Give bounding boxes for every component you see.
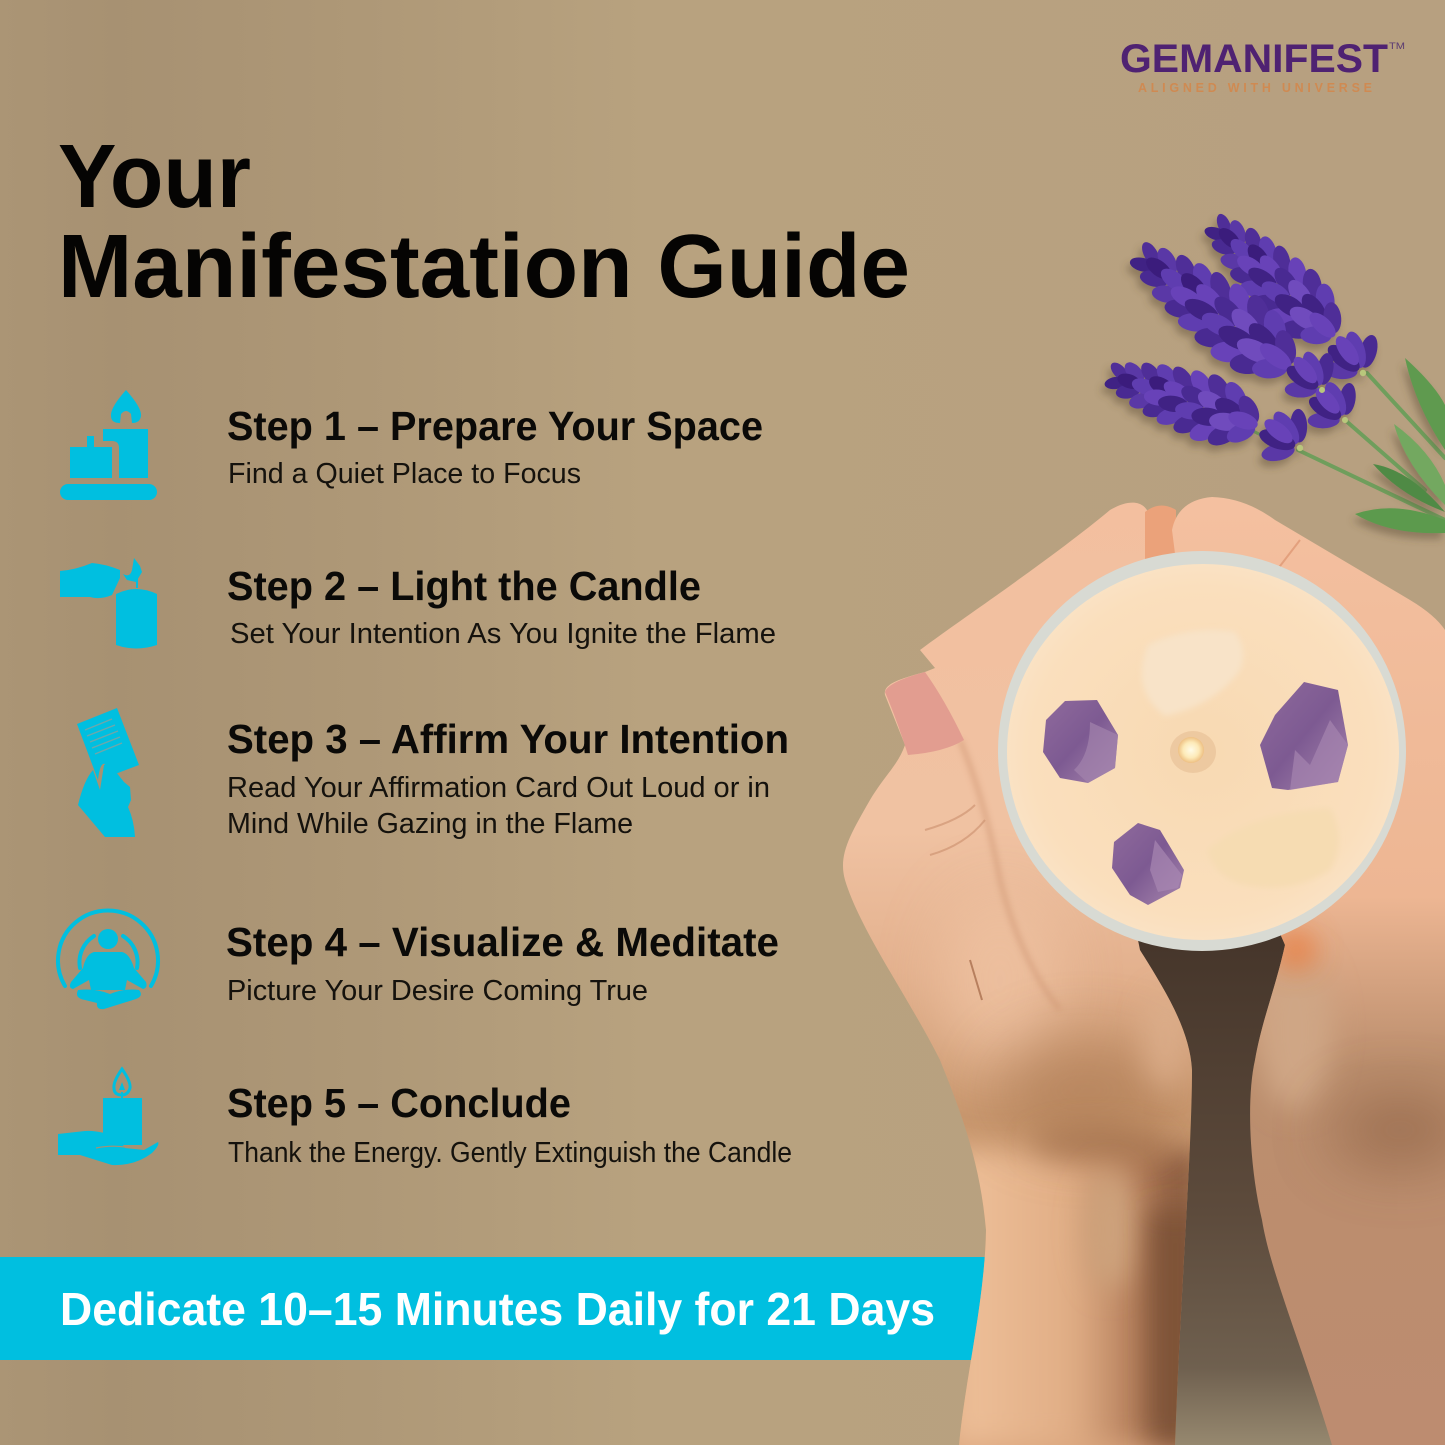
right hand [1145, 490, 1445, 1445]
clear crystal bottom [1207, 808, 1339, 888]
banner text: Dedicate 10–15 Minutes Daily for 21 Days [60, 1283, 935, 1335]
step 5 heading: Step 5 – Conclude [227, 1080, 571, 1126]
title: Manifestation Guide [58, 217, 910, 317]
stems [1255, 338, 1445, 520]
trademark: TM [1389, 41, 1405, 51]
title [58, 127, 910, 317]
step 4 text: Picture Your Desire Coming True [227, 975, 648, 1007]
step 5 [58, 1069, 792, 1169]
candle wax [1007, 564, 1399, 940]
clear crystal top [1142, 630, 1243, 716]
step 4 [58, 910, 779, 1009]
candle [998, 551, 1406, 951]
step 5 text: Thank the Energy. Gently Extinguish the Candle [228, 1137, 792, 1169]
step 3 text [227, 772, 770, 840]
left hand shape [830, 490, 1200, 1445]
icon: candles on tray [60, 390, 157, 500]
right hand shape [1160, 490, 1445, 1445]
left hand [830, 490, 1200, 1445]
logo tagline: ALIGNED WITH UNIVERSE [1138, 81, 1372, 95]
step 1 heading: Step 1 – Prepare Your Space [227, 403, 763, 449]
logo wordmark: GEMANIFEST [1120, 37, 1388, 81]
step 3 [77, 708, 789, 840]
logo [1120, 37, 1405, 95]
amethyst bottom [1112, 823, 1184, 905]
candle glass rim [998, 551, 1406, 951]
middle finger [1145, 505, 1176, 590]
step 4 heading: Step 4 – Visualize & Meditate [226, 919, 779, 965]
title: Your [58, 127, 251, 227]
thumb nail [885, 672, 964, 755]
banner [0, 1257, 990, 1360]
lavender sprigs [1093, 191, 1445, 533]
step 3 heading: Step 3 – Affirm Your Intention [227, 716, 789, 762]
step 1 [60, 390, 763, 500]
step 1 text: Find a Quiet Place to Focus [228, 458, 581, 490]
amethyst right [1260, 682, 1348, 790]
banner bar [0, 1257, 990, 1360]
gap between the wrists [1130, 930, 1335, 1445]
leaves [1355, 358, 1445, 533]
candle flame [1170, 731, 1216, 773]
step 2 [60, 558, 776, 650]
step 2 text: Set Your Intention As You Ignite the Flame [230, 618, 776, 650]
step 3 text: Read Your Affirmation Card Out Loud or in [227, 772, 770, 804]
amethyst left [1043, 700, 1118, 783]
icon: hand holding card [77, 708, 139, 837]
icon: meditating figure [58, 910, 158, 1009]
icon: hand lighting candle [60, 558, 157, 648]
step 3 text: Mind While Gazing in the Flame [227, 808, 633, 840]
spikes [1093, 191, 1394, 478]
thumb edge shading [960, 740, 1060, 1010]
icon: candle on palm [58, 1069, 158, 1165]
step 2 heading: Step 2 – Light the Candle [227, 563, 701, 609]
